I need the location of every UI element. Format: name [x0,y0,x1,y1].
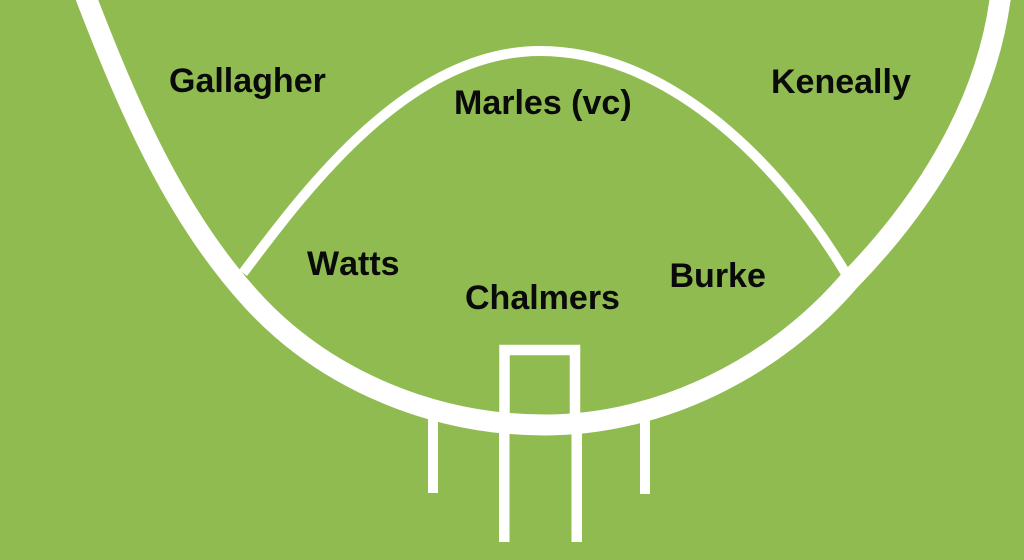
goal square [504,350,575,415]
right behind post [640,418,650,494]
forward arc [243,51,845,273]
right goal post [572,432,582,542]
name: Chalmers: Chalmers [465,279,620,317]
name: Gallagher: Gallagher [169,62,326,100]
name: Burke: Burke [670,257,766,295]
name: Marles (vc): Marles (vc) [454,84,632,122]
left goal post [499,432,510,542]
name: Keneally: Keneally [771,63,911,101]
left behind post [428,418,438,493]
name: Watts: Watts [307,245,400,283]
boundary line [80,0,1004,425]
